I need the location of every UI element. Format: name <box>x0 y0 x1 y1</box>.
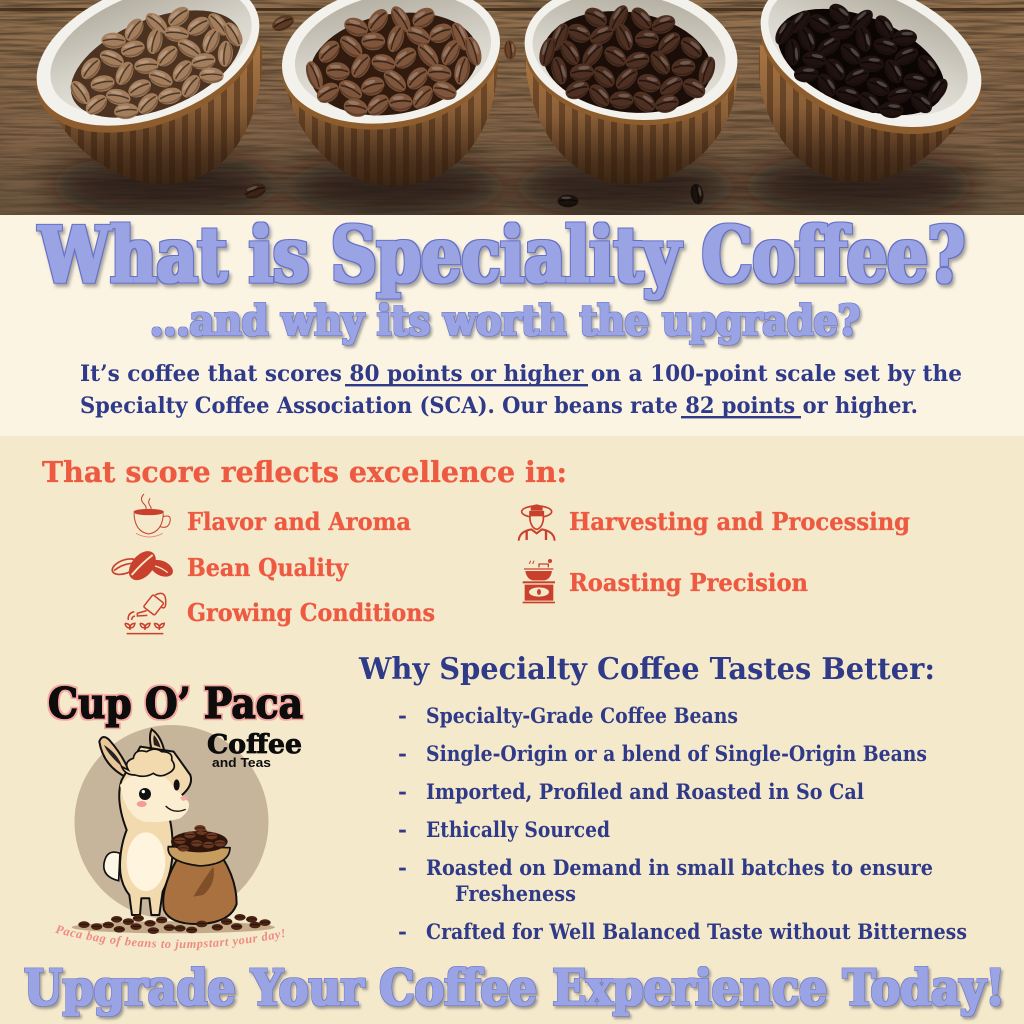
alpaca face <box>139 788 151 800</box>
list item: specialty grade: - <box>398 704 407 729</box>
list item: roasting precision: Roasting Precision <box>569 568 808 597</box>
alpaca tail <box>104 852 120 881</box>
cup: very dark roast <box>739 0 1003 182</box>
text block: definition: Specialty Coffee Association (SCA). Our beans rate 82 points or higher. <box>80 393 918 419</box>
logo tagline: Paca bag of beans to jumpstart your day! <box>55 925 284 951</box>
list item: growing conditions: Growing Conditions <box>187 598 435 627</box>
beans in bag <box>171 825 228 852</box>
alpaca body <box>119 747 191 915</box>
logo coffee text: Coffee <box>207 730 302 760</box>
text block: definition <box>80 361 962 419</box>
icon: coffee grinder <box>523 559 555 603</box>
list item: roasted on demand: Fresheness <box>455 882 576 907</box>
logo teas text: and Teas <box>212 756 271 770</box>
list item: single origin: - <box>398 742 407 767</box>
panel: coffee roast photo <box>0 0 1024 217</box>
alpaca ears <box>99 737 130 778</box>
list item: single origin: Single-Origin or a blend of Single-Origin Beans <box>426 742 927 767</box>
list item: harvesting and processing: Harvesting and Processing <box>569 507 910 536</box>
bean pile <box>78 914 271 934</box>
heading: excellence: That score reflects excellence in: <box>42 455 567 489</box>
alpaca hair <box>122 749 174 776</box>
heading: why it tastes better: Why Specialty Coffee Tastes Better: <box>358 652 935 687</box>
list item: bean quality <box>110 546 349 585</box>
list item: imported: Imported, Profiled and Roasted in So Cal <box>426 780 864 805</box>
list item: flavor and aroma: Flavor and Aroma <box>187 507 411 536</box>
icon: coffee beans <box>110 546 176 585</box>
list item: roasting precision <box>523 559 808 603</box>
list item: specialty grade: Specialty-Grade Coffee Beans <box>426 704 738 729</box>
cup: dark roast <box>516 0 746 184</box>
logo wordmark: Cup O’ Paca <box>48 679 303 728</box>
list item: harvesting and processing <box>519 504 910 541</box>
list item: ethically sourced: - <box>398 818 407 843</box>
list item: roasted on demand: - <box>398 856 407 881</box>
logo circle <box>74 725 268 919</box>
list item: crafted: - <box>398 920 407 945</box>
list item: roasted on demand <box>398 856 933 907</box>
panel: logo <box>47 679 304 951</box>
subtitle: ...and why its worth the upgrade? <box>150 296 860 345</box>
list item: ethically sourced: Ethically Sourced <box>426 818 610 843</box>
illustration: alpaca with coffee bag <box>55 728 284 951</box>
list item: growing conditions <box>125 593 435 634</box>
list item: crafted: Crafted for Well Balanced Taste without Bitterness <box>426 920 967 945</box>
icon: coffee cup <box>134 494 170 537</box>
list item: imported: - <box>398 780 407 805</box>
icon: watering can and seedlings <box>125 593 166 634</box>
coffee bag <box>163 859 237 924</box>
list item: roasted on demand: Roasted on Demand in small batches to ensure <box>426 856 933 881</box>
list: reasons <box>398 704 967 945</box>
panel: details background <box>0 436 1024 1024</box>
panel: intro background <box>0 215 1024 436</box>
cup: medium roast <box>271 0 511 186</box>
cup shadows <box>50 153 975 217</box>
cup: light roast <box>16 0 280 184</box>
list item: flavor and aroma <box>134 494 411 537</box>
text block: definition: It’s coffee that scores 80 points or higher on a 100-point scale set by the <box>80 361 962 387</box>
loose beans on table <box>242 12 705 207</box>
list item: bean quality: Bean Quality <box>187 553 349 582</box>
icon: farmer <box>519 504 555 541</box>
